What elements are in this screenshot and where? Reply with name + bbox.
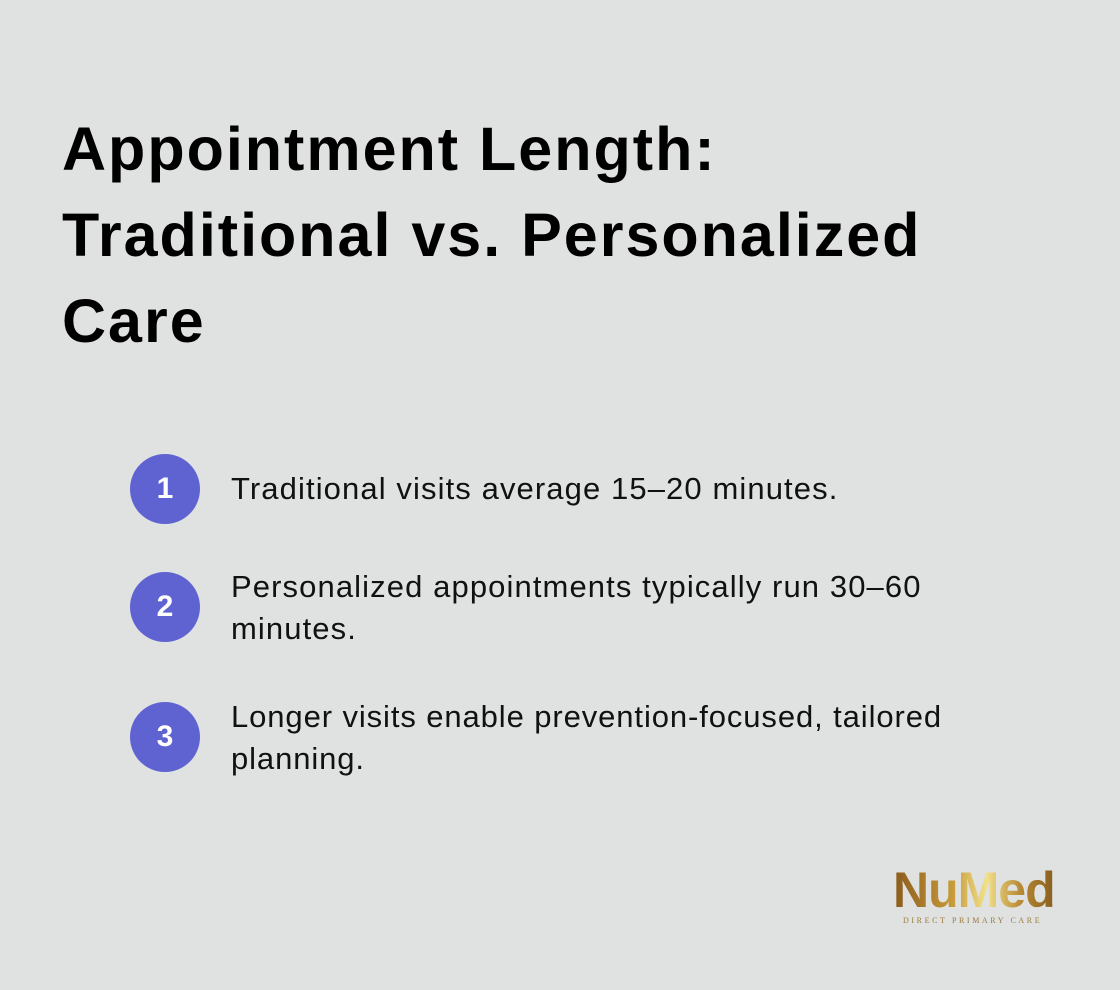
number badge 1: 1 bbox=[157, 472, 173, 505]
text 3: Longer visits enable prevention-focused, tailored planning. bbox=[231, 699, 942, 776]
number badge 1 bbox=[130, 454, 200, 524]
text 2: Personalized appointments typically run 30–60 minutes. bbox=[231, 569, 922, 646]
title: Care bbox=[62, 287, 206, 355]
number badge 3: 3 bbox=[157, 720, 173, 753]
title bbox=[62, 115, 921, 355]
logo: DIRECT PRIMARY CARE bbox=[903, 916, 1042, 925]
title: Traditional vs. Personalized bbox=[62, 201, 921, 269]
item 1 bbox=[130, 454, 838, 524]
number badge 2: 2 bbox=[157, 590, 173, 623]
title: Appointment Length: bbox=[62, 115, 717, 183]
text 1: Traditional visits average 15–20 minutes. bbox=[231, 471, 838, 506]
item 2 bbox=[130, 569, 922, 646]
logo: NuMed bbox=[893, 862, 1055, 918]
item 3 bbox=[130, 699, 942, 776]
number badge 2 bbox=[130, 572, 200, 642]
number badge 3 bbox=[130, 702, 200, 772]
